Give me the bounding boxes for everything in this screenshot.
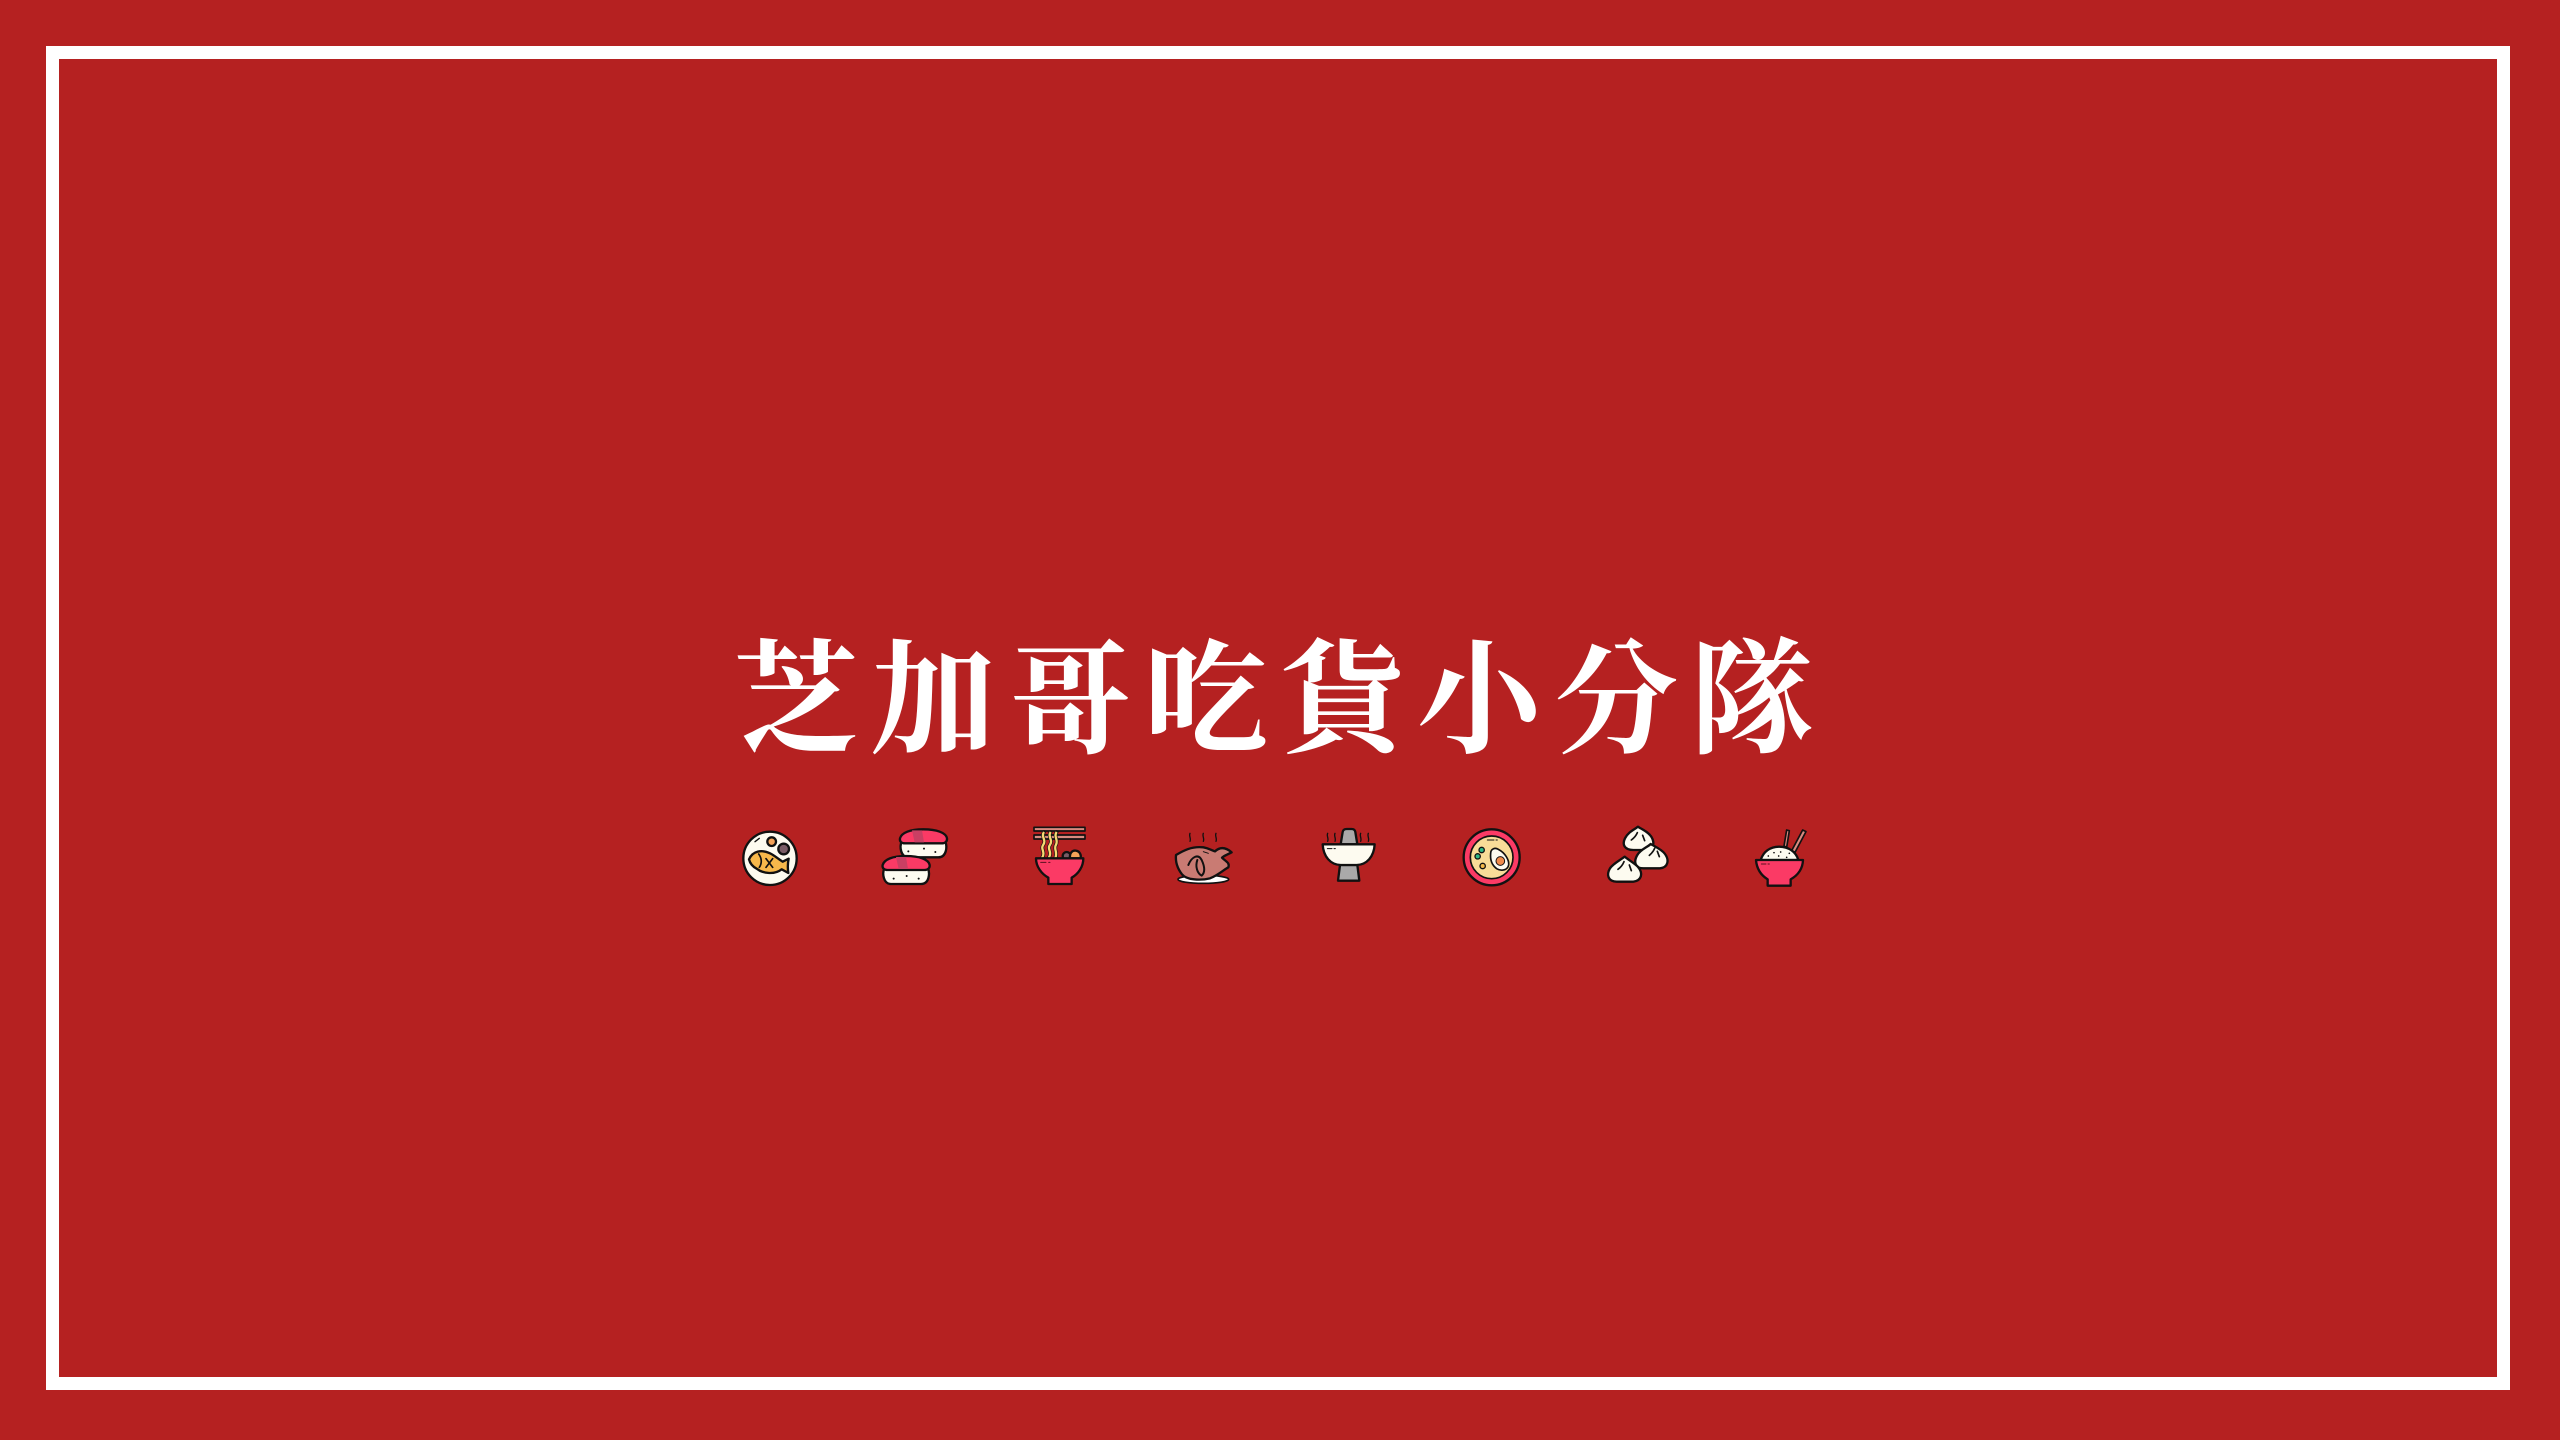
icon: sushi pair [883,829,947,884]
title [734,633,1814,770]
title: 分 [1554,633,1678,770]
icon group: fish, sushi, noodles [743,827,1085,885]
icon: roast chicken [1176,833,1232,883]
title: 加 [871,633,995,770]
icon: steamed buns [1608,827,1668,882]
title: 哥 [1008,633,1132,770]
icon: hot pot [1323,829,1375,881]
title: 小 [1417,633,1551,770]
icon row [743,827,1806,886]
title: 貨 [1280,633,1417,770]
icon: rice bowl with chopsticks [1756,830,1806,886]
icon: fish plate [743,832,797,885]
title: 芝 [734,633,858,770]
icon group: buns, rice bowl [1608,827,1806,886]
title: 隊 [1690,633,1814,770]
title: 吃 [1144,633,1268,770]
icon: egg soup bowl [1464,829,1520,885]
icon group: chicken, hotpot, soup [1176,829,1520,885]
icon: noodle bowl [1034,827,1085,884]
